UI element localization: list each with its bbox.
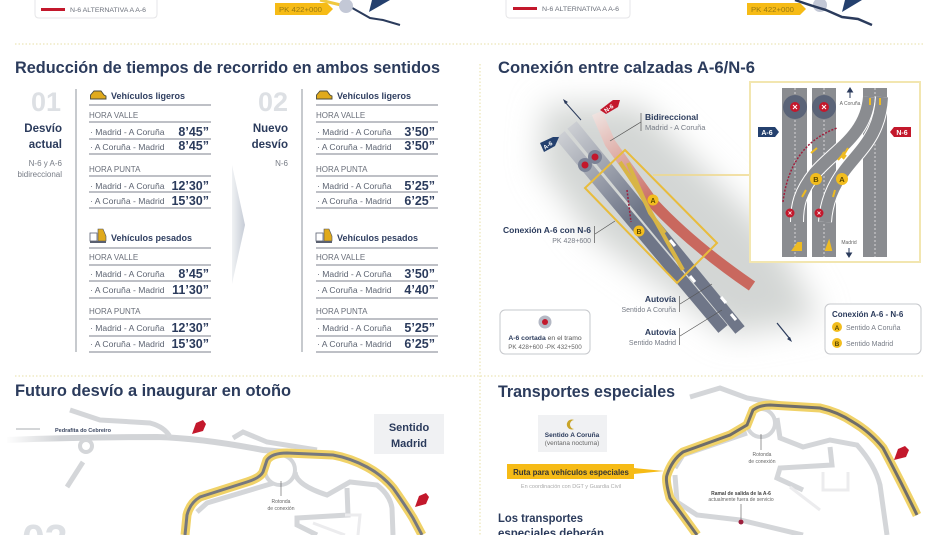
light vehicles table: 8’45” — [178, 125, 209, 139]
icon: moon — [567, 419, 574, 430]
N-6 marker — [192, 420, 206, 434]
night window box — [538, 415, 607, 452]
badge B — [634, 226, 644, 236]
light vehicles table: · A Coruña - Madrid — [90, 142, 165, 152]
roundabout — [265, 455, 295, 485]
callout: A-6 closed: A-6 cortada en el tramo — [508, 335, 582, 342]
heavy vehicles table — [316, 229, 438, 352]
heavy vehicles table: 11’30” — [172, 283, 209, 297]
light vehicles table: · Madrid - A Coruña — [90, 181, 165, 191]
arrow: current to new detour — [232, 165, 245, 284]
badge A: A — [650, 198, 656, 205]
A-6 tag — [540, 137, 559, 152]
place label: Pedrafita do Cebreiro — [55, 428, 112, 434]
heavy vehicles table: 12’30” — [171, 321, 209, 335]
light vehicles table: 6’25” — [404, 194, 435, 208]
PK marker: PK 422+000 — [279, 5, 322, 14]
road end — [320, 0, 400, 25]
label: motorway towards A Coruña: Autovía — [645, 294, 676, 304]
closed road dotted arc — [783, 128, 837, 202]
heavy vehicles table: HORA PUNTA — [316, 307, 368, 316]
step 02 label: N-6 — [275, 159, 289, 168]
heavy vehicles table: · A Coruña - Madrid — [90, 285, 165, 295]
direction arrow — [16, 428, 40, 430]
light vehicles table: · A Coruña - Madrid — [317, 142, 392, 152]
legend: N-6 alternative: N-6 ALTERNATIVA A A-6 — [542, 6, 619, 13]
heavy vehicles table: 6’25” — [404, 337, 435, 351]
label: A-6 N-6 connection: Conexión A-6 con N-6 — [503, 225, 591, 235]
text: special transports must: Los transportes — [498, 511, 583, 525]
light vehicles table: HORA PUNTA — [89, 165, 141, 174]
legend: connection A-6 N-6: Conexión A-6 - N-6 — [832, 310, 904, 319]
heavy vehicles table: 8’45” — [178, 267, 209, 281]
N-6 bidirectional road — [597, 113, 752, 286]
heavy vehicles table: 4’40” — [404, 283, 435, 297]
label: roundabout: Rotonda — [272, 499, 291, 505]
legend: connection A-6 N-6: Sentido A Coruña — [846, 325, 901, 332]
route callout — [507, 464, 664, 490]
heavy vehicles table: Vehículos pesados — [337, 233, 418, 243]
light vehicles table: HORA VALLE — [89, 111, 138, 120]
step 02 label: desvío — [252, 139, 288, 151]
heavy vehicles table: · Madrid - A Coruña — [317, 323, 392, 333]
light vehicles table: 5’25” — [404, 179, 435, 193]
heavy vehicles table: 15’30” — [171, 337, 209, 351]
direction A Coruña: A Coruña — [840, 101, 861, 107]
roundabout — [747, 409, 775, 437]
heading: travel time reduction: Reducción de tiempos de recorrido en ambos sentidos — [15, 58, 440, 77]
legend: connection A-6 N-6: B — [835, 341, 840, 348]
label: motorway towards Madrid: Sentido Madrid — [629, 340, 676, 347]
step 01 label — [18, 87, 63, 179]
direction box: Madrid — [391, 438, 427, 450]
legend: connection A-6 N-6 — [825, 304, 921, 354]
label: motorway towards Madrid: Autovía — [645, 327, 676, 337]
carriageways — [782, 88, 887, 257]
heavy vehicles table: · A Coruña - Madrid — [317, 339, 392, 349]
label: motorway towards A Coruña: Sentido A Coruña — [622, 307, 676, 314]
badge A — [648, 194, 658, 206]
faint building outlines — [313, 515, 360, 535]
badge A: A — [839, 175, 845, 184]
aerial photo background — [540, 105, 820, 335]
ramp A — [825, 97, 882, 222]
PK marker — [747, 3, 806, 15]
light vehicles table — [316, 91, 438, 208]
light vehicles table: 3’50” — [404, 125, 435, 139]
label: bidirectional — [610, 112, 706, 141]
yellow connection ramps — [620, 162, 683, 270]
badge B — [810, 173, 822, 185]
step 01 label: 01 — [31, 87, 61, 117]
yellow road arrows — [793, 98, 880, 250]
link to inset — [653, 174, 750, 176]
legend: N-6 alternative — [506, 0, 630, 18]
label: exit ramp: actualmente fuera de servicio — [708, 497, 774, 503]
heading: connection between carriageways: Conexión entre calzadas A-6/N-6 — [498, 58, 755, 77]
label: roundabout: Rotonda — [753, 452, 772, 458]
icon: car — [316, 91, 332, 99]
N-6 marker — [415, 493, 429, 507]
light vehicles table: HORA PUNTA — [316, 165, 368, 174]
label: exit ramp: Ramal de salida de la A-6 — [711, 491, 771, 497]
ramp B — [797, 97, 869, 222]
direction Madrid: Madrid — [841, 240, 857, 246]
step 01 label: N-6 y A-6 — [29, 159, 63, 168]
legend: connection A-6 N-6: A — [835, 325, 840, 332]
direction A Coruña — [840, 88, 861, 107]
legend: N-6 alternative — [35, 0, 157, 18]
heavy vehicles table: HORA PUNTA — [89, 307, 141, 316]
badge B: B — [636, 229, 642, 236]
light vehicles table: HORA VALLE — [316, 111, 365, 120]
heavy vehicles table: · A Coruña - Madrid — [90, 339, 165, 349]
light vehicles table: Vehículos ligeros — [337, 91, 411, 101]
callout: A-6 closed — [500, 310, 590, 354]
label: bidirectional: Bidireccional — [645, 112, 698, 122]
heavy vehicles table: 3’50” — [404, 267, 435, 281]
label: A-6 N-6 connection: PK 428+600 — [552, 238, 591, 245]
panel: top right map fragment — [506, 0, 872, 25]
panel: top left map fragment — [35, 0, 400, 25]
step 02 label: Nuevo — [253, 123, 288, 135]
step 01 label: actual — [29, 139, 62, 151]
PK marker: PK 422+000 — [751, 5, 794, 14]
heavy vehicles table — [89, 229, 211, 352]
heavy vehicles table: 5’25” — [404, 321, 435, 335]
heavy vehicles table: · Madrid - A Coruña — [90, 269, 165, 279]
grey road network — [7, 410, 393, 535]
A-6 tag: A-6 — [543, 141, 555, 151]
heading: future detour: Futuro desvío a inaugurar en otoño — [15, 381, 291, 400]
panel: new detour times — [252, 87, 438, 352]
step 02 label: 02 — [258, 87, 288, 117]
A-6 tag — [758, 127, 779, 137]
closure markers — [578, 150, 602, 172]
label: roundabout — [749, 434, 776, 465]
icon: car — [90, 91, 106, 99]
night window box: Sentido A Coruña — [545, 432, 600, 439]
label: motorway towards Madrid — [629, 310, 722, 347]
direction arrow A Coruña — [563, 99, 581, 120]
heavy vehicles table: · A Coruña - Madrid — [317, 285, 392, 295]
N-6 tag: N-6 — [896, 130, 908, 137]
light vehicles table: Vehículos ligeros — [111, 91, 185, 101]
label: exit ramp — [708, 491, 774, 524]
direction box: Sentido — [389, 422, 429, 434]
panel: special transports — [498, 388, 917, 535]
A-6 tag: A-6 — [761, 130, 773, 137]
light vehicles table: · Madrid - A Coruña — [90, 127, 165, 137]
dotted closure — [627, 190, 631, 222]
step 02 label — [252, 87, 289, 168]
light vehicles table: · Madrid - A Coruña — [317, 181, 392, 191]
label: motorway towards A Coruña — [622, 284, 712, 314]
light vehicles table: 8’45” — [178, 139, 209, 153]
heavy vehicles table: · Madrid - A Coruña — [90, 323, 165, 333]
inset frame — [750, 82, 920, 262]
label: bidirectional: Madrid - A Coruña — [645, 123, 706, 132]
light vehicles table: 15’30” — [171, 194, 209, 208]
badge A — [836, 173, 848, 185]
panel: current detour times — [18, 87, 211, 352]
label: roundabout: de conexión — [749, 459, 776, 465]
grey road network — [675, 388, 887, 535]
icon: truck — [316, 229, 332, 243]
text: special transports must — [498, 511, 604, 535]
label: roundabout — [268, 481, 295, 512]
faint building outlines — [790, 472, 848, 510]
icon: truck — [90, 229, 106, 243]
A-6 carriageways — [560, 125, 740, 330]
N-6 marker — [894, 446, 909, 460]
N-6 tag — [600, 100, 620, 114]
route callout: Ruta para vehículos especiales — [513, 468, 630, 477]
badge B: B — [813, 175, 819, 184]
light vehicles table: 12’30” — [171, 179, 209, 193]
panel: future detour map — [7, 410, 444, 535]
N-6 tag — [890, 127, 911, 137]
legend: N-6 alternative: N-6 ALTERNATIVA A A-6 — [70, 7, 146, 14]
direction arrow Madrid — [777, 323, 792, 342]
main yellow route — [185, 453, 422, 535]
panel: aerial connection map — [500, 99, 921, 354]
step 01 label: Desvío — [24, 123, 62, 135]
direction Madrid — [841, 240, 857, 257]
direction box — [374, 414, 444, 454]
connection frame — [585, 150, 717, 283]
light vehicles table: · Madrid - A Coruña — [317, 127, 392, 137]
heavy vehicles table: Vehículos pesados — [111, 233, 192, 243]
light vehicles table: · A Coruña - Madrid — [90, 196, 165, 206]
legend: connection A-6 N-6: Sentido Madrid — [846, 341, 893, 348]
heading: special transports: Transportes especiales — [498, 382, 675, 401]
route callout: En coordinación con DGT y Guardia Civil — [521, 484, 621, 490]
callout: A-6 closed: PK 428+600 -PK 432+500 — [508, 344, 582, 351]
N-6 tag: N-6 — [604, 104, 616, 114]
label: roundabout: de conexión — [268, 506, 295, 512]
road end — [795, 0, 872, 25]
PK marker — [275, 3, 333, 15]
heavy vehicles table: HORA VALLE — [316, 253, 365, 262]
light vehicles table: · A Coruña - Madrid — [317, 196, 392, 206]
heavy vehicles table: · Madrid - A Coruña — [317, 269, 392, 279]
light vehicles table — [89, 91, 211, 208]
step 01 label: bidireccional — [18, 170, 62, 179]
panel: inset road diagram — [750, 82, 920, 262]
special route — [666, 405, 917, 535]
heavy vehicles table: HORA VALLE — [89, 253, 138, 262]
light vehicles table: 3’50” — [404, 139, 435, 153]
closure markers — [783, 95, 836, 218]
night window box: (ventana nocturna) — [545, 440, 599, 447]
label: A-6 N-6 connection — [503, 221, 615, 245]
